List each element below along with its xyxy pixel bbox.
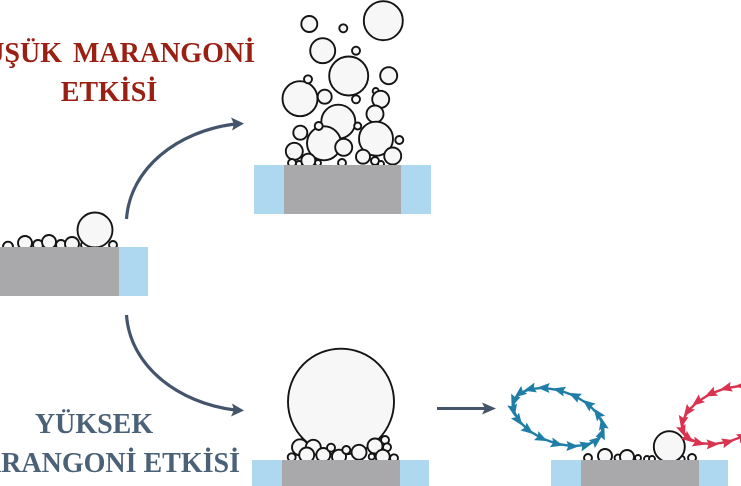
blue circulation loop (505, 377, 611, 457)
arrow: up to low effect (126, 118, 244, 219)
far right result: bubble with circulation (551, 431, 728, 486)
initial state: bubbles on substrate (0, 212, 148, 296)
heading: high Marangoni effect (0, 409, 240, 479)
heading: high Marangoni effect: YÜKSEK (35, 409, 153, 440)
substrate (254, 165, 431, 214)
substrate (551, 460, 728, 486)
bubbles (288, 349, 398, 464)
heading: low Marangoni effect: MARANGONİ (73, 38, 255, 69)
bubbles (584, 431, 696, 464)
substrate (0, 247, 148, 296)
substrate (252, 460, 429, 486)
arrow: to circulation result (437, 402, 496, 414)
arrow: down to high effect (126, 315, 244, 416)
bottom result: large coalesced bubble (252, 349, 429, 486)
top result: detached bubbles (254, 1, 431, 214)
red circulation loop (674, 375, 741, 455)
heading: low Marangoni effect: ETKİSİ (61, 77, 157, 108)
heading: low Marangoni effect (0, 38, 255, 108)
small and large bubbles (3, 212, 117, 252)
bubble cluster (282, 1, 403, 168)
